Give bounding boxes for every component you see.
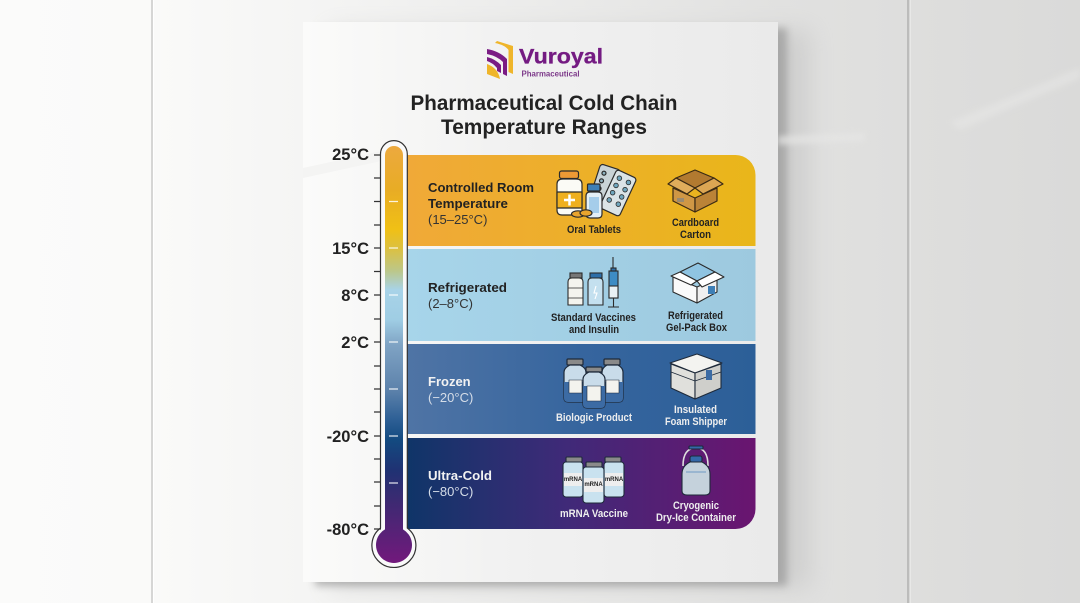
label: cardboard carton: Cardboard xyxy=(672,217,719,229)
band heading: Ultra-Cold xyxy=(428,468,492,483)
tick marks xyxy=(374,155,381,529)
vial labels xyxy=(564,477,624,488)
label: gel-pack box: Gel-Pack Box xyxy=(666,322,728,334)
back blister pack xyxy=(590,164,621,204)
temperature labels: 8°C xyxy=(341,287,369,305)
vial labels: mRNA xyxy=(564,477,583,483)
icon: mRNA vials xyxy=(563,457,624,503)
icon: logo mark xyxy=(487,41,513,79)
label: cardboard carton: Carton xyxy=(680,229,711,241)
vial labels: mRNA xyxy=(605,477,624,483)
temperature labels: 25°C xyxy=(332,146,369,164)
band: controlled room temperature xyxy=(407,155,756,246)
icon: cardboard carton xyxy=(668,170,723,212)
label: gel-pack box: Refrigerated xyxy=(668,310,723,322)
label: insulated foam shipper: Foam Shipper xyxy=(665,416,728,428)
band: refrigerated xyxy=(407,249,756,341)
thermometer fill xyxy=(376,146,412,563)
poster board xyxy=(303,22,865,588)
label: insulated foam shipper: Insulated xyxy=(674,404,717,416)
label: standard vaccines and insulin: Standard Vaccines xyxy=(551,312,636,324)
icon: cryogenic container xyxy=(682,446,710,495)
band range: (−20°C) xyxy=(428,390,473,405)
band heading: Refrigerated xyxy=(428,280,507,295)
label: cardboard carton xyxy=(672,217,719,241)
temperature labels: 15°C xyxy=(332,240,369,258)
icon: gel-pack box xyxy=(671,263,724,303)
front blister pack xyxy=(599,169,637,217)
label: mRNA vaccine: mRNA Vaccine xyxy=(560,508,628,520)
label: oral tablets: Oral Tablets xyxy=(567,224,621,236)
label: cryogenic container: Dry-Ice Container xyxy=(656,512,737,524)
vial labels: mRNA xyxy=(584,482,603,488)
band: ultra-cold xyxy=(407,438,756,529)
title: Pharmaceutical Cold Chain xyxy=(410,91,678,115)
label: gel-pack box xyxy=(666,310,728,334)
band range: (−80°C) xyxy=(428,484,473,499)
band heading: Frozen xyxy=(428,374,471,389)
inner ticks xyxy=(389,202,398,483)
band heading: Controlled Room xyxy=(428,180,534,195)
label: cryogenic container: Cryogenic xyxy=(673,500,719,512)
band: controlled room temperature: Temperature xyxy=(428,196,508,211)
band range: (15–25°C) xyxy=(428,212,487,227)
temperature labels xyxy=(327,146,369,539)
thermometer tube and bulb xyxy=(372,141,416,567)
logo subtitle: Pharmaceutical xyxy=(522,70,580,78)
icon: vaccines and syringe xyxy=(568,257,619,307)
title xyxy=(410,91,678,139)
label: insulated foam shipper xyxy=(665,404,728,428)
icon: oral tablets xyxy=(557,164,637,218)
logo wordmark: Vuroyal xyxy=(519,46,603,68)
temperature labels: -80°C xyxy=(327,521,369,539)
temperature labels: 2°C xyxy=(341,334,369,352)
logo xyxy=(487,41,603,79)
label: standard vaccines and insulin: and Insulin xyxy=(569,324,619,336)
label: standard vaccines and insulin xyxy=(551,312,636,336)
label: cryogenic container xyxy=(656,500,737,524)
icon: foam shipper xyxy=(670,354,722,399)
icon: biologic vials xyxy=(564,359,623,408)
thermometer xyxy=(327,141,416,567)
temperature labels: -20°C xyxy=(327,428,369,446)
label: biologic product: Biologic Product xyxy=(556,412,632,424)
band: frozen xyxy=(407,344,756,434)
band range: (2–8°C) xyxy=(428,296,473,311)
title: Temperature Ranges xyxy=(441,115,647,139)
